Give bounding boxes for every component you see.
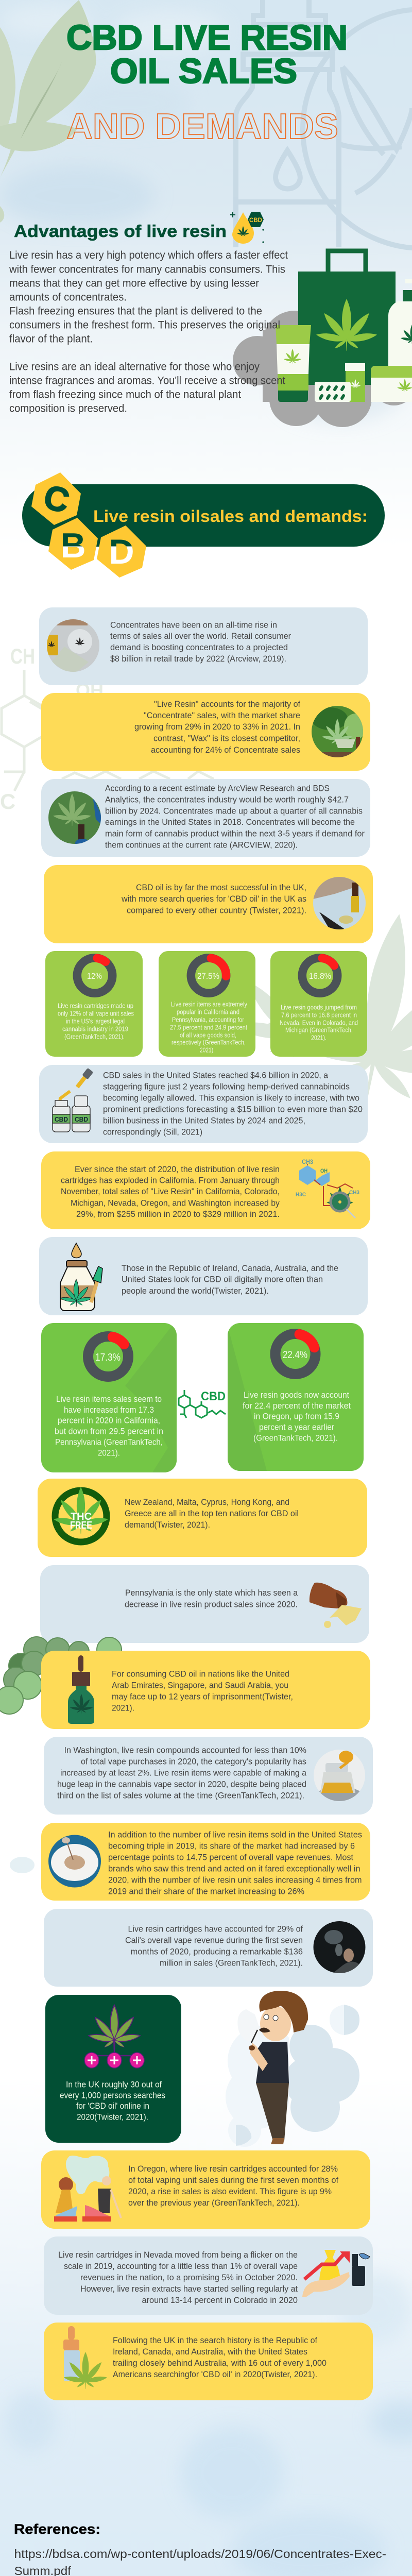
text: million in sales (GreenTankTech, 2021). <box>160 1958 303 1968</box>
text: contrast, "Wax" is its closest competitor, <box>153 734 300 743</box>
text: in Oregon, up from 15.9 <box>254 1412 339 1421</box>
text: 2019 and their share of the market increasing to 26% <box>108 1887 304 1896</box>
faint molecule watermark, left: CH <box>10 644 35 668</box>
faint molecule watermark, left: OH <box>76 680 104 701</box>
text: Ever since the start of 2020, the distribution of live resin <box>75 1164 280 1174</box>
text: Pennsylvania, accounting for <box>172 1016 245 1023</box>
text: compared to every other country (Twister, 2021). <box>127 906 306 915</box>
text: Michigan, Nevada, Oregon, and Washington increased by <box>71 1198 280 1208</box>
donut chart 27.5%: 27.5% <box>197 971 219 981</box>
donut chart 16.8%: 16.8% <box>309 971 331 981</box>
text <box>121 883 306 915</box>
text <box>58 2250 298 2305</box>
icon: money bag, rising arrow and vape <box>302 2250 370 2297</box>
donut chart 27.5% <box>191 958 226 993</box>
section banner: Live resin oilsales and demands: <box>93 507 368 526</box>
text <box>112 1669 293 1713</box>
hexagon B: B <box>60 526 86 565</box>
text block: reference links: https://bdsa.com/wp-content/uploads/2019/06/Concentrates-Exec- <box>14 2547 386 2561</box>
icon: leaf with plus nodes <box>84 2005 144 2068</box>
text <box>280 1004 358 1042</box>
text: prominent predictions forecasting a $15 billion to even more than $20 <box>103 1105 363 1114</box>
pump bottle and jar <box>371 279 412 402</box>
heading: advantages of live resin: Advantages of live resin <box>14 222 227 241</box>
panel: 27.5% stat <box>159 951 255 1057</box>
text: huge leap in the cannabis vape sector in 2020, despite being placed <box>57 1780 306 1789</box>
text: (GreenTankTech, 2021). <box>64 1032 125 1041</box>
text: billion by 2024. Concentrates made up about a quarter of all cannabis <box>105 806 363 816</box>
text: scale in 2019, accounting for a little less than 1% of overall vape <box>64 2261 298 2271</box>
illustration: man smoking pipe with cloud <box>226 1991 359 2147</box>
text: decrease in live resin product sales since 2020. <box>125 1599 298 1609</box>
text <box>113 2335 327 2379</box>
illustration: two women vaping <box>54 2156 121 2222</box>
icon: molecule and magnified leaf: CH3 <box>302 1158 313 1165</box>
text: Pennsylvania is the only state which has seen a <box>125 1588 298 1598</box>
text: every 1,000 persons searches <box>60 2091 165 2100</box>
text: cartridges has exploded in California. From January through <box>61 1176 280 1185</box>
text: growing from 29% in 2020 to 33% in 2021. In <box>134 722 300 732</box>
text: In Oregon, where live resin cartridges accounted for 28% <box>128 2164 338 2174</box>
text: only 12% of all vape unit sales <box>58 1010 134 1017</box>
text: third on the list of sales volume at the time (GreenTankTech, 2021). <box>57 1791 304 1800</box>
pill blister and bottle <box>315 363 365 402</box>
text: $8 billion in retail trade by 2022 (Arcview, 2019). <box>110 654 286 664</box>
text: them continues at the current rate (ARCVIEW, 2020). <box>105 840 298 850</box>
text: 2021). <box>98 1448 120 1458</box>
decorative bottle and cannabis outline, top right <box>236 0 412 248</box>
text: staggering figure just 2 years following hemp-derived cannabinoids <box>103 1082 350 1091</box>
cloud <box>226 2005 359 2147</box>
text: In Washington, live resin compounds accounted for less than 10% <box>64 1745 306 1755</box>
icon: CBD molecule: CBD <box>201 1389 226 1403</box>
icon: CBD oil drop <box>230 212 264 244</box>
donut chart 17.3% <box>88 1336 128 1377</box>
text block: advantages <box>9 249 288 414</box>
legs <box>256 2083 289 2141</box>
hexagon C <box>31 472 81 525</box>
text: in the US's largest legal <box>66 1017 125 1025</box>
text block: advantages: Live resin has a very high potency which offers a faster effect <box>9 249 288 261</box>
hexagon C: C <box>40 477 73 520</box>
text: popular in California and <box>177 1008 239 1016</box>
text <box>134 699 300 755</box>
text: Live resin goods jumped from <box>281 1004 357 1011</box>
panel: 16.8% stat <box>270 951 367 1057</box>
text: 27.5 percent and 24.9 percent <box>170 1023 247 1031</box>
text: revenues in the nation, to a promising 5% in October 2020. <box>80 2273 298 2282</box>
icon: wooden jar with resin crumbs <box>310 1583 362 1628</box>
text <box>125 1588 298 1609</box>
photo: man exhaling vapour <box>313 1921 366 1976</box>
text: percent a year earlier <box>259 1422 334 1432</box>
panel: 17.3% stat <box>41 1323 177 1472</box>
text: but down from 29.5 percent in <box>55 1426 163 1436</box>
text: for 22.4 percent of the market <box>243 1401 351 1411</box>
photo: plant in shopping cart <box>312 706 367 757</box>
text block: advantages: Live resins are an ideal alternative for those who enjoy <box>9 361 260 373</box>
text: 2020, with the number of live resin unit sales increasing 4 times from <box>108 1875 362 1885</box>
faint cannabis leaves watermark, right <box>231 894 412 1119</box>
text block: advantages: amounts of concentrates. <box>9 292 127 303</box>
panel: 12% stat <box>45 951 143 1057</box>
text <box>108 1830 362 1896</box>
text <box>110 620 291 664</box>
panel: following the UK <box>44 2323 373 2400</box>
text: In the UK roughly 30 out of <box>66 2079 162 2090</box>
text: billion business in the United States by 2024 and 2025, <box>103 1116 305 1125</box>
text: 2021). <box>311 1033 327 1042</box>
photo: oil bottle and capsules <box>313 877 366 929</box>
decorative green hop cluster <box>0 1637 122 1714</box>
text: correspondingly (Sill, 2021) <box>103 1127 202 1137</box>
text block: advantages: intense fragrances and aromas. You'll receive a strong scent <box>9 375 285 386</box>
title: AND DEMANDS <box>66 106 338 146</box>
text: November, total sales of "Live Resin" in California, Colorado, <box>61 1187 280 1196</box>
hexagon B <box>48 518 98 570</box>
panel: CBD oil in the UK <box>44 865 373 943</box>
panel: UK searches <box>45 1995 181 2143</box>
text: Live resin items are extremely <box>171 1001 247 1008</box>
text block: advantages: flavor of the plant. <box>9 333 93 345</box>
donut chart 22.4%: 22.4% <box>283 1349 307 1361</box>
text: Greece are all in the top ten nations for CBD oil <box>125 1509 299 1518</box>
text: Analytics, the concentrates industry would be worth roughly $42.7 <box>105 794 349 805</box>
panel: Washington <box>44 1737 373 1815</box>
icon: CBD bottles and dropper: CBD <box>55 1115 68 1123</box>
panel: concentrates industry worth <box>41 779 370 857</box>
text: Nevada. Even in Colorado, and <box>280 1019 358 1026</box>
text: around 13-14 percent in Colorado in 2020 <box>142 2295 298 2305</box>
icon: THC free badge: FREE <box>70 1520 92 1531</box>
text: Following the UK in the search history is the Republic of <box>113 2335 317 2345</box>
text: Live resin cartridges in Nevada moved from being a flicker on the <box>58 2250 298 2260</box>
donut chart 17.3%: 17.3% <box>95 1352 121 1363</box>
CBD hexagons <box>31 472 146 578</box>
text: In addition to the number of live resin items sold in the United States <box>108 1830 362 1839</box>
text: Live resin cartridges have accounted for 29% of <box>128 1924 303 1934</box>
text: over the previous year (GreenTankTech, 2021). <box>128 2198 300 2208</box>
text: percent in 2020 in California, <box>58 1416 160 1425</box>
panel: number of live resin items <box>41 1823 370 1901</box>
title: OIL SALES <box>110 52 297 91</box>
text <box>125 1924 303 1968</box>
text: terms of sales all over the world. Retail consumer <box>110 631 291 641</box>
icon: CBD bottles and dropper <box>53 1068 93 1132</box>
text <box>243 1390 351 1443</box>
text: Cali's overall vape revenue during the first seven <box>125 1935 303 1945</box>
head <box>260 2006 291 2041</box>
tube <box>276 325 311 402</box>
panel: Ireland, Canada, Australia searches <box>39 1237 368 1315</box>
arm and pipe <box>250 2043 268 2071</box>
decorative green leaves, top left <box>0 0 96 223</box>
icon: CBD oil drop: CBD <box>249 216 262 224</box>
smoke <box>237 2009 260 2042</box>
text: 2020, a rise in sales is also evident. This figure is up 9% <box>128 2187 332 2196</box>
text: "Live Resin" accounts for the majority of <box>154 699 300 709</box>
text: Pennsylvania (GreenTankTech, <box>55 1437 163 1447</box>
text: people around the world(Twister, 2021). <box>122 1286 269 1296</box>
faint molecule watermark, left: C <box>0 789 15 814</box>
text <box>105 783 365 850</box>
grey cloud <box>233 311 412 427</box>
icon: oil bottle with dropper <box>60 1243 102 1311</box>
text: "Concentrate" sales, with the market share <box>144 710 300 720</box>
panel: live resin share <box>41 693 370 771</box>
section banner <box>22 484 385 547</box>
text: (GreenTankTech, 2021). <box>253 1433 338 1443</box>
text: Live resin cartridges made up <box>58 1002 133 1010</box>
donut chart 16.8% <box>302 958 337 993</box>
text: 2020(Twister, 2021). <box>77 2112 148 2122</box>
panel: New Zealand, Malta, Cyprus <box>38 1479 367 1557</box>
text: Concentrates have been on an all-time rise in <box>110 620 277 630</box>
text: becoming triple in 2019, its share of the market had increased by 6 <box>108 1841 355 1851</box>
text: Arab Emirates, Singapore, and Saudi Arabia, you <box>112 1681 288 1690</box>
panel: Oregon <box>41 2150 370 2229</box>
icon: CBD molecule <box>179 1389 226 1418</box>
text: respectively (GreenTankTech, <box>171 1039 246 1046</box>
title: CBD LIVE RESIN <box>66 18 348 57</box>
icon: THC free badge: THC <box>71 1511 92 1522</box>
icon: CBD bottles and dropper: CBD <box>75 1115 88 1123</box>
text: 2021). <box>200 1046 215 1054</box>
text: 2021). <box>112 1703 134 1713</box>
text: CBD sales in the United States reached $4.6 billion in 2020, a <box>103 1071 329 1080</box>
text: New Zealand, Malta, Cyprus, Hong Kong, and <box>125 1497 289 1507</box>
text: Live resin items sales seem to <box>56 1394 162 1404</box>
text: of all vape goods sold, <box>180 1031 236 1039</box>
text <box>58 1002 134 1041</box>
faint molecule watermark, left <box>0 644 214 814</box>
donut chart 22.4% <box>275 1334 315 1374</box>
panel: Pennsylvania decrease <box>40 1565 369 1643</box>
icon: green CBD bottle <box>68 1655 94 1724</box>
text block: advantages: Flash freezing ensures that the plant is delivered to the <box>9 305 262 317</box>
donut chart 12% <box>77 958 112 993</box>
text: of total vaping unit sales during the first seven months of <box>128 2175 338 2185</box>
panel: Cali vape revenue <box>44 1909 373 1987</box>
text <box>170 1001 247 1054</box>
text block: advantages: with fewer concentrates for many cannabis consumers. This <box>9 264 285 275</box>
text: CBD oil is by far the most successful in the UK, <box>136 883 306 892</box>
illustration: cannabis products on grey cloud <box>233 251 412 427</box>
text <box>125 1497 299 1530</box>
text: brands who saw this trend and acted on it fared exceptionally well in <box>108 1864 360 1873</box>
text: However, live resin extracts have started selling regularly at <box>80 2284 298 2294</box>
text: According to a recent estimate by ArcView Research and BDS <box>105 783 330 793</box>
text: have increased from 17.3 <box>64 1405 154 1415</box>
text: increased by at least 2%. Live resin items were capable of making a <box>60 1768 306 1777</box>
photo: money and concentrate <box>47 619 99 676</box>
heading: references: References: <box>14 2521 100 2537</box>
text <box>128 2164 338 2208</box>
hexagon D <box>97 526 146 578</box>
text: trailing closely behind Australia, with 16 out of every 1,000 <box>113 2358 327 2368</box>
text: demand(Twister, 2021). <box>125 1520 210 1530</box>
text block: reference links <box>14 2547 399 2576</box>
shirt <box>254 2042 289 2083</box>
photo: dropper over plant <box>48 791 101 847</box>
icon: molecule and magnified leaf: OH <box>320 1168 328 1174</box>
text <box>55 1394 163 1458</box>
text: becoming legally allowed. This expansion is likely to increase, with two <box>103 1093 359 1103</box>
text: accounting for 24% of Concentrate sales <box>151 745 300 755</box>
text: For consuming CBD oil in nations like the United <box>112 1669 289 1679</box>
panel: Nevada <box>44 2236 373 2315</box>
photo: dab tool on white dish <box>48 1835 101 1888</box>
hexagon D: D <box>109 532 134 571</box>
text: months of 2020, producing a remarkable $136 <box>131 1946 303 1957</box>
panel: distribution in California <box>41 1151 370 1229</box>
text: percentage points to 14.75 percent of overall vape revenues. Most <box>108 1853 353 1862</box>
text: may face up to 12 years of imprisonment(Twister, <box>112 1692 293 1701</box>
donut chart 12%: 12% <box>87 971 102 981</box>
photo: glass jar with resin <box>314 1750 365 1801</box>
text block: advantages: means that they can get more effective by using lesser <box>9 277 259 290</box>
title <box>66 18 348 146</box>
text <box>103 1071 363 1137</box>
text: with more search queries for 'CBD oil' in the UK as <box>121 894 306 904</box>
text <box>60 2079 165 2122</box>
faint smoke wisp <box>10 1857 35 1873</box>
panel: UAE, Singapore, Saudi Arabia <box>41 1651 370 1729</box>
text <box>122 1263 338 1296</box>
icon: molecule and magnified leaf <box>296 1158 359 1218</box>
text: for 'CBD oil' online in <box>76 2101 149 2111</box>
text: Those in the Republic of Ireland, Canada, Australia, and the <box>122 1263 338 1273</box>
text: main form of cannabis product within the next 3-5 years if demand for <box>105 828 365 839</box>
text: cannabis industry in 2019 <box>62 1025 128 1032</box>
text: 29%, from $255 million in 2020 to $329 million in 2021. <box>76 1209 280 1219</box>
icon: dropper bottle with leaf <box>63 2326 108 2389</box>
text block: advantages: consumers in the freshest form. This preserves the original <box>9 319 280 331</box>
text block: advantages: from flash freezing since much of the natural plant <box>9 388 241 401</box>
text: of total vape purchases in 2020, the category's popularity has <box>81 1757 306 1766</box>
text: demand is boosting concentrates to a projected <box>110 642 288 652</box>
text: earnings in the United States in 2018. Concentrates will become the <box>105 817 355 827</box>
panel: CBD sales in the United States <box>39 1065 368 1143</box>
panel: 22.4% stat <box>228 1323 364 1471</box>
icon: THC free badge <box>53 1487 109 1542</box>
panel: concentrates rise <box>39 607 368 685</box>
text: Americans searchingfor 'CBD oil' in 2020(Twister, 2021). <box>113 2369 317 2379</box>
text: United States look for CBD oil digitally more often than <box>122 1275 323 1284</box>
text block: advantages: composition is preserved. <box>9 403 127 414</box>
icon: molecule and magnified leaf: CH3 <box>349 1190 359 1196</box>
text: Michigan (GreenTankTech, <box>285 1026 353 1033</box>
shopping bag <box>298 251 396 385</box>
text: Ireland, Canada, and Australia, with the United States <box>113 2347 307 2357</box>
text <box>61 1164 280 1219</box>
text: Live resin goods now account <box>244 1390 349 1400</box>
icon: molecule and magnified leaf: H3C <box>296 1192 306 1198</box>
text: 7.6 percent to 16.8 percent in <box>281 1011 357 1019</box>
text <box>57 1745 306 1800</box>
